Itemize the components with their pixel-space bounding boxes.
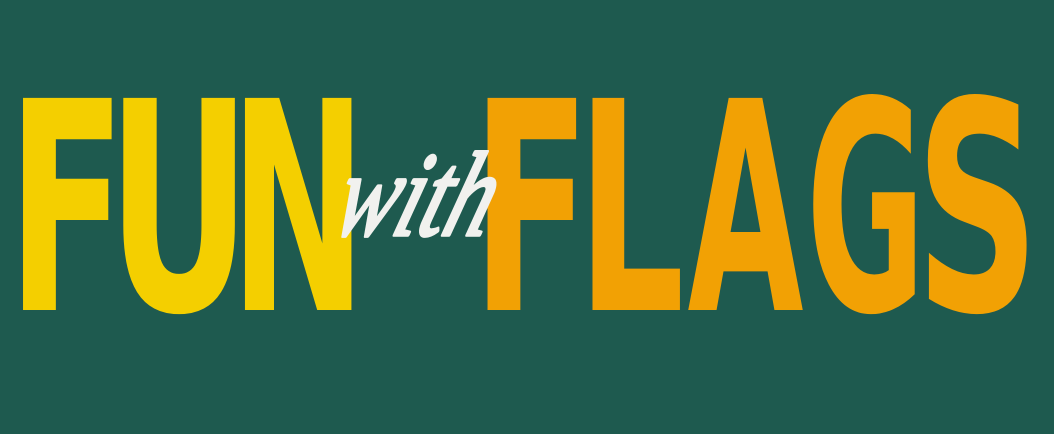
heading word: FLAGS: G <box>806 41 925 380</box>
heading word: FUN: N <box>230 40 366 379</box>
heading word: FLAGS: S <box>916 41 1039 379</box>
script word: with: with <box>320 128 519 261</box>
heading word: FLAGS <box>472 40 1039 380</box>
heading word: FLAGS: F <box>472 40 591 379</box>
heading word: FUN <box>7 40 366 379</box>
heading word: FLAGS: L <box>577 41 685 380</box>
heading word: FUN: U <box>107 40 251 379</box>
heading word: FUN: F <box>7 40 126 379</box>
heading word: FLAGS: A <box>688 40 803 379</box>
